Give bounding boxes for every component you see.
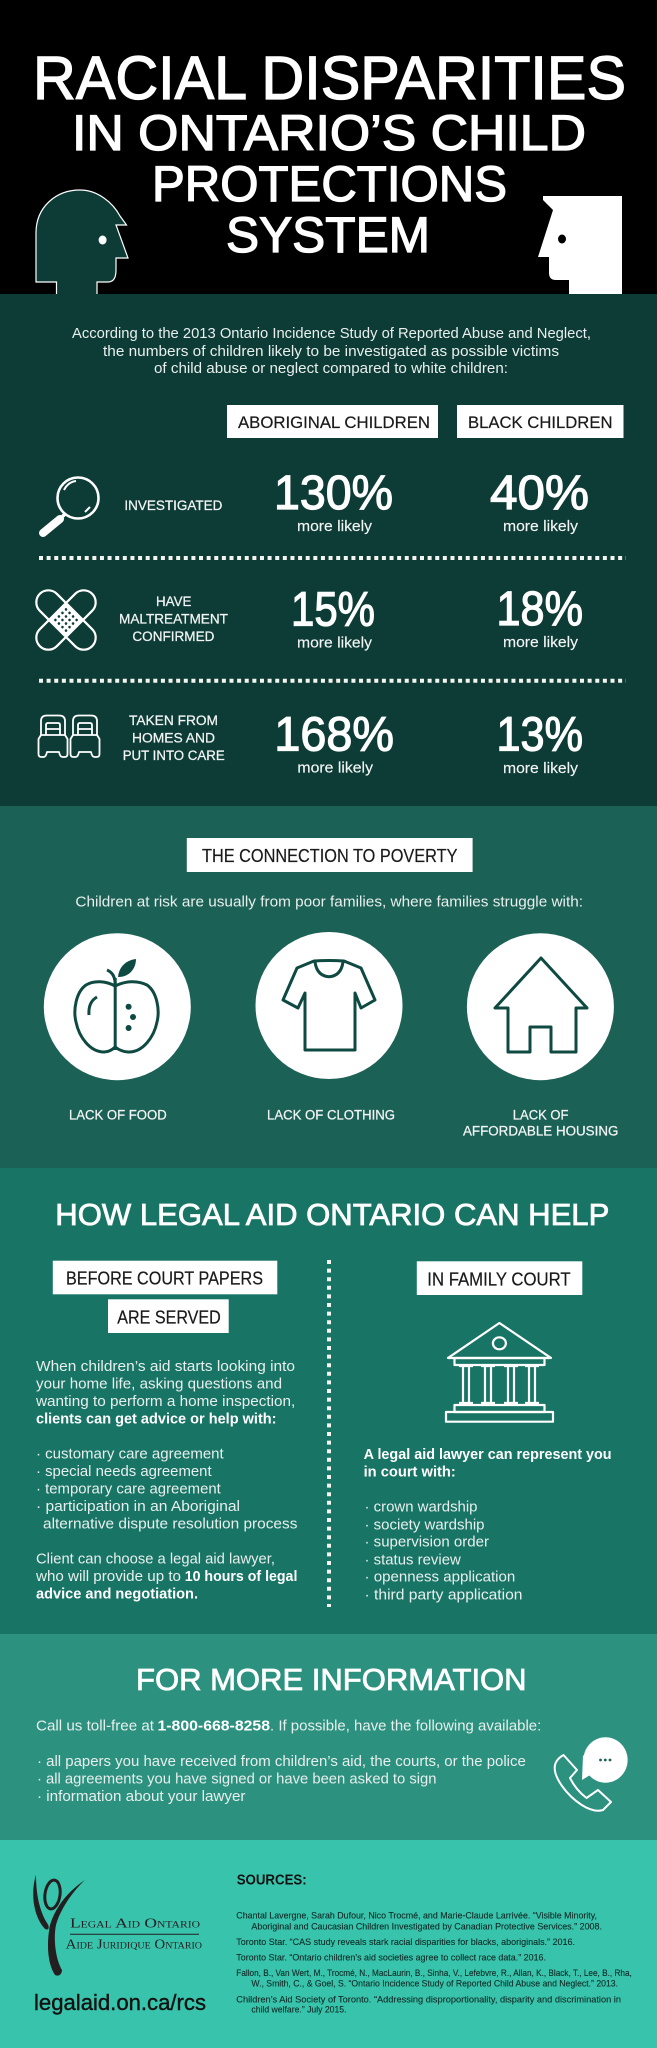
- icon: beds: [38, 716, 100, 757]
- icon: right head: [538, 196, 622, 294]
- sources heading: SOURCES:: [237, 1872, 307, 1888]
- label: lack of clothing: LACK OF CLOTHING: [267, 1107, 395, 1122]
- list: advice services: · temporary care agreement: [36, 1480, 222, 1497]
- title: IN ONTARIO’S CHILD: [72, 105, 586, 161]
- stat: aboriginal maltreatment: more likely: [297, 635, 373, 652]
- text: a legal aid lawyer can represent you: in court with:: [364, 1464, 456, 1481]
- row label: have maltreatment confirmed: CONFIRMED: [132, 629, 215, 644]
- panel: connection to poverty: [0, 806, 657, 1168]
- icon: magnifying glass: [43, 478, 98, 533]
- heading: the connection to poverty: [187, 838, 473, 872]
- list: what to have available: [37, 1753, 526, 1805]
- list: court services: [364, 1499, 522, 1603]
- row label: have maltreatment confirmed: MALTREATMENT: [119, 611, 228, 626]
- stat: black investigated: 40%: [490, 467, 589, 520]
- column label: black children: BLACK CHILDREN: [468, 414, 612, 432]
- label: lack of affordable housing: AFFORDABLE HOUSING: [463, 1124, 618, 1139]
- intro text: the numbers of children likely to be investigated as possible victims: [103, 343, 559, 360]
- subheading: before court papers are served: ARE SERVED: [117, 1307, 221, 1327]
- stat: aboriginal investigated: 130%: [274, 467, 393, 520]
- list: court services: · crown wardship: [364, 1499, 478, 1516]
- heading: for more information: FOR MORE INFORMATION: [136, 1662, 527, 1697]
- panel: for more information: [0, 1634, 657, 1840]
- sources list: Chantal Lavergne, Sarah Dufour, Nico Trocmé, and Marie-Claude Larrivée. “Visible Minority,: [236, 1911, 597, 1922]
- icon: house: [467, 933, 614, 1080]
- title: PROTECTIONS: [152, 156, 507, 212]
- list: court services: · supervision order: [364, 1534, 489, 1551]
- text: a legal aid lawyer can represent you: [364, 1446, 612, 1481]
- sources list: [236, 1911, 632, 2016]
- label: lack of affordable housing: [463, 1107, 618, 1139]
- text: client can choose a lawyer: advice and negotiation.: [36, 1586, 198, 1603]
- sources list: Aboriginal and Caucasian Children Investigated by Canadian Protective Services.” 2008.: [251, 1921, 602, 1932]
- column label: aboriginal children: ABORIGINAL CHILDREN: [238, 414, 430, 432]
- text: client can choose a lawyer: [35, 1551, 297, 1603]
- icon: phone with speech bubble: [555, 1737, 628, 1811]
- stat: aboriginal investigated: more likely: [297, 518, 373, 535]
- sources list: Children’s Aid Society of Toronto. “Addressing disproportionality, disparity and discrimination in: [236, 1994, 621, 2005]
- icon: left head: [36, 190, 128, 294]
- sources list: child welfare.” July 2015.: [251, 2005, 346, 2016]
- list: court services: · society wardship: [364, 1516, 484, 1533]
- text: call us toll-free: [36, 1718, 541, 1735]
- row label: have maltreatment confirmed: HAVE: [156, 594, 192, 609]
- text: a legal aid lawyer can represent you: A legal aid lawyer can represent you: [364, 1446, 612, 1463]
- intro text: According to the 2013 Ontario Incidence Study of Reported Abuse and Neglect,: [72, 325, 591, 342]
- column label: black children: [457, 405, 624, 438]
- stat: black maltreatment: 18%: [496, 583, 583, 636]
- logo: legal aid ontario: Aide Juridique Ontario: [66, 1937, 203, 1952]
- row label: investigated: INVESTIGATED: [124, 498, 223, 513]
- text: when children's aid: [35, 1358, 295, 1427]
- text: client can choose a lawyer: 10 hours of legal: [185, 1568, 297, 1585]
- stat: black maltreatment: more likely: [503, 634, 579, 651]
- row label: taken from homes: PUT INTO CARE: [123, 748, 225, 763]
- icon: apple: [44, 933, 191, 1080]
- heading: the connection to poverty: THE CONNECTION TO POVERTY: [202, 846, 458, 866]
- panel: footer: [0, 1840, 657, 2048]
- icon: courthouse: [446, 1323, 553, 1422]
- logo: legal aid ontario: [33, 1875, 203, 1976]
- row label: taken from homes: HOMES AND: [132, 731, 215, 746]
- title: [33, 44, 626, 263]
- text: when children's aid: wanting to perform a home inspection,: [35, 1393, 295, 1410]
- list: court services: · third party application: [364, 1586, 522, 1603]
- list: advice services: alternative dispute resolution process: [43, 1515, 297, 1532]
- column label: aboriginal children: [227, 405, 438, 438]
- label: lack of food: LACK OF FOOD: [69, 1107, 167, 1122]
- list: advice services: · customary care agreement: [36, 1445, 225, 1462]
- row label: have maltreatment confirmed: [119, 594, 228, 644]
- text: when children's aid: clients can get advice or help with:: [36, 1410, 276, 1427]
- panel: title header: [0, 0, 657, 294]
- row label: taken from homes: [123, 713, 225, 763]
- text: call us toll-free: . If possible, have the following available:: [270, 1718, 541, 1735]
- subheading: in family court: IN FAMILY COURT: [427, 1269, 571, 1289]
- subheading: in family court: [417, 1261, 582, 1295]
- list: what to have available: · all agreements you have signed or have been asked to sign: [37, 1770, 436, 1787]
- panel: how legal aid can help: [0, 1168, 657, 1634]
- website url: legalaid.on.ca/rcs: [34, 1990, 206, 2015]
- list: advice services: · participation in an Aboriginal: [36, 1498, 240, 1515]
- stat: aboriginal maltreatment: 15%: [291, 584, 375, 637]
- list: advice services: · special needs agreement: [36, 1463, 212, 1480]
- panel: statistics: [0, 294, 657, 806]
- list: court services: · openness application: [364, 1569, 515, 1586]
- heading: how legal aid ontario can help: HOW LEGAL AID ONTARIO CAN HELP: [55, 1197, 609, 1232]
- stat: black investigated: more likely: [503, 518, 579, 535]
- text: when children's aid: your home life, asking questions and: [36, 1375, 282, 1392]
- logo: legal aid ontario: Legal Aid Ontario: [70, 1915, 201, 1930]
- icon: bandage: [31, 585, 101, 655]
- text: when children's aid: When children’s aid starts looking into: [36, 1358, 295, 1375]
- row label: taken from homes: TAKEN FROM: [129, 713, 218, 728]
- list: what to have available: · all papers you have received from children’s aid, the courts, or the police: [37, 1753, 526, 1770]
- sources list: Toronto Star. “CAS study reveals stark racial disparities for blacks, aboriginals.” 2016.: [236, 1937, 575, 1948]
- icon: t-shirt: [256, 932, 402, 1079]
- intro text: [72, 325, 591, 377]
- stat: aboriginal taken into care: 168%: [274, 709, 394, 762]
- text: call us toll-free: Call us toll-free at: [36, 1718, 155, 1735]
- label: lack of affordable housing: LACK OF: [513, 1107, 568, 1122]
- stat: black taken into care: more likely: [503, 760, 579, 777]
- text: client can choose a lawyer: who will provide up to: [35, 1568, 181, 1585]
- title: RACIAL DISPARITIES: [33, 44, 626, 112]
- stat: aboriginal taken into care: more likely: [297, 760, 374, 777]
- intro text: of child abuse or neglect compared to white children:: [154, 360, 508, 377]
- list: advice services: [36, 1445, 297, 1532]
- text: client can choose a lawyer: Client can choose a legal aid lawyer,: [36, 1551, 275, 1568]
- list: court services: · status review: [364, 1551, 461, 1568]
- text: call us toll-free: 1-800-668-8258: [158, 1718, 270, 1735]
- stat: black taken into care: 13%: [496, 709, 583, 762]
- poverty intro text: Children at risk are usually from poor families, where families struggle with:: [75, 894, 583, 911]
- list: what to have available: · information about your lawyer: [37, 1788, 246, 1805]
- sources list: W., Smith, C., & Goel, S. “Ontario Incidence Study of Reported Child Abuse and Neglect.” 2013.: [251, 1979, 618, 1990]
- sources list: Toronto Star. “Ontario children’s aid societies agree to collect race data.” 2016.: [236, 1953, 546, 1964]
- subheading: before court papers are served: [53, 1261, 277, 1333]
- subheading: before court papers are served: BEFORE COURT PAPERS: [66, 1269, 263, 1289]
- title: SYSTEM: [226, 207, 430, 263]
